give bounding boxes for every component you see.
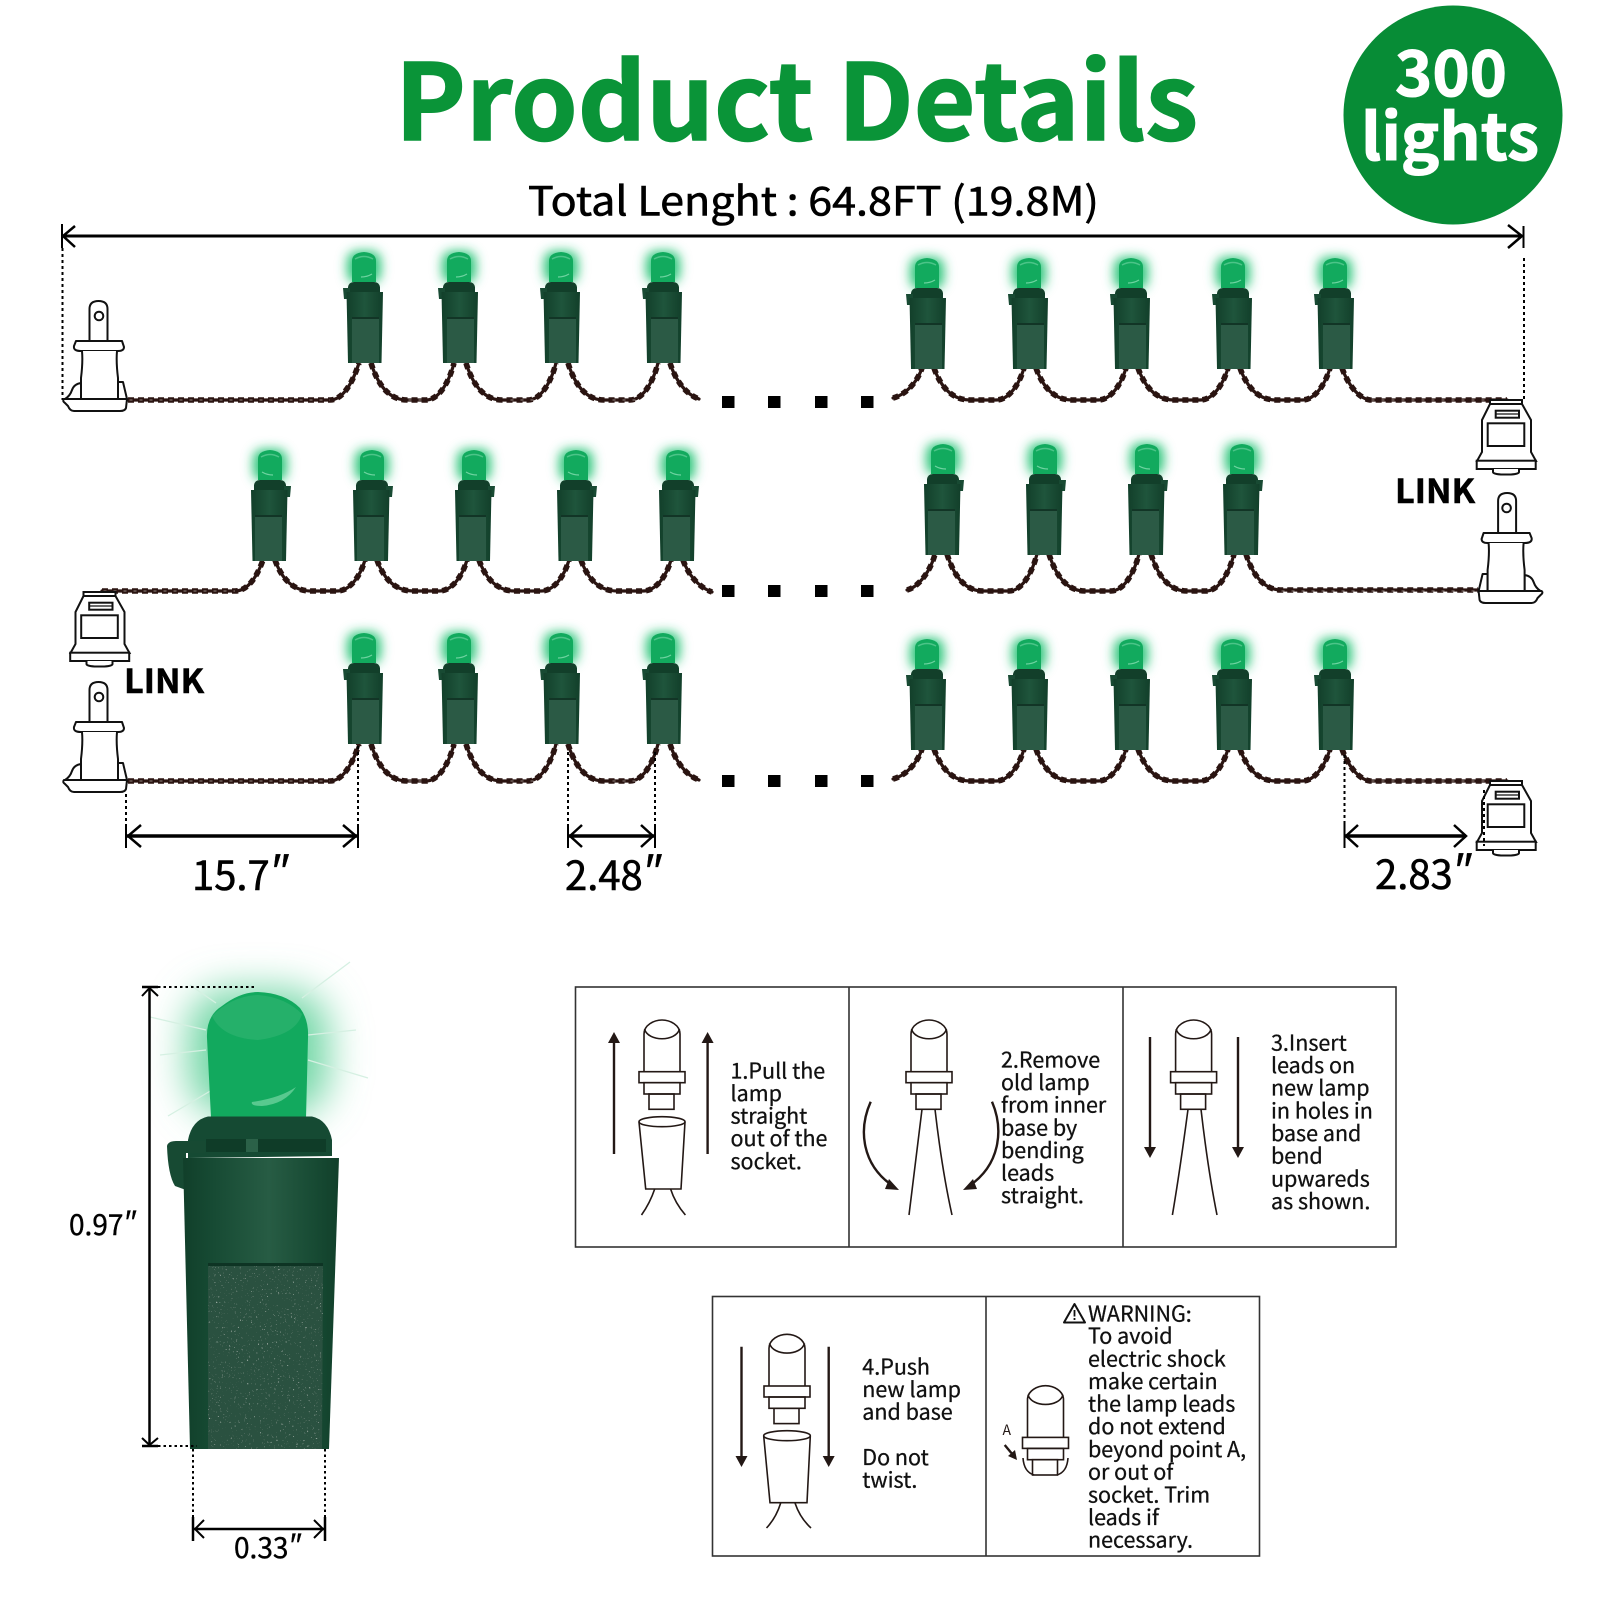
- warning: electric shock: [1088, 1342, 1226, 1374]
- lamp bulb: [207, 992, 308, 1118]
- warning: leads if: [1088, 1501, 1160, 1532]
- step 2: 2.Remove: [1001, 1044, 1100, 1074]
- badge: 300 lights: lights: [1361, 87, 1539, 179]
- step 4: [736, 1334, 961, 1528]
- step 1: socket.: [730, 1145, 802, 1176]
- badge: 300 lights: 300: [1395, 24, 1507, 115]
- total length label: Total Lenght : 64.8FT (19.8M): [528, 170, 1099, 228]
- step 2: old lamp: [1001, 1066, 1090, 1097]
- dimension: 15.7 inch: 15.7: [192, 844, 270, 902]
- light string row 1: [63, 251, 1536, 474]
- step 3: new lamp: [1271, 1072, 1370, 1102]
- step 3: upwareds: [1271, 1162, 1370, 1194]
- light string row 3: [63, 632, 1536, 856]
- LINK label right: LINK: [1395, 465, 1475, 513]
- step 2: bending: [1001, 1134, 1084, 1165]
- step 4: Do not: [862, 1441, 929, 1472]
- warning: make certain: [1088, 1365, 1218, 1396]
- dimension: 2.48 inch: 2.48: [565, 844, 643, 902]
- step 2: straight.: [1001, 1179, 1084, 1210]
- step 4: twist.: [862, 1464, 917, 1494]
- lamp glow and rays: [150, 962, 368, 1116]
- width label: ″: [288, 1527, 301, 1565]
- lamp socket body: [167, 1116, 339, 1449]
- step 2: leads: [1001, 1156, 1054, 1188]
- total length arrow: [62, 224, 1524, 400]
- warning: do not extend: [1088, 1410, 1226, 1441]
- step 3: as shown.: [1271, 1185, 1370, 1216]
- dimension: 2.83 inch: 2.83: [1375, 843, 1453, 901]
- warning: socket. Trim: [1088, 1478, 1210, 1510]
- warning: necessary.: [1088, 1524, 1193, 1554]
- light string row 2: [70, 443, 1542, 666]
- step 1: straight: [730, 1100, 807, 1130]
- dimension: 2.48 inch: ″: [643, 844, 663, 900]
- dimension: 2.83 inch: ″: [1453, 843, 1473, 899]
- step 4: and base: [862, 1396, 953, 1426]
- step 1: out of the: [730, 1122, 827, 1153]
- instruction panel: steps 1 to 3: [576, 987, 1396, 1247]
- title: Product Details: [395, 19, 1198, 171]
- height label: ″: [123, 1204, 136, 1242]
- warning: [1002, 1298, 1246, 1554]
- step 1: lamp: [730, 1077, 782, 1108]
- dimension: 15.7 inch: [126, 746, 358, 902]
- warning: WARNING:: [1088, 1298, 1192, 1328]
- lamp height dimension: [142, 987, 255, 1446]
- step 3: leads on: [1271, 1049, 1355, 1080]
- warning: A: [1002, 1420, 1012, 1440]
- badge: 300 lights: [1344, 6, 1562, 224]
- large lamp close-up: [69, 962, 368, 1567]
- height label: 0.97: [69, 1204, 123, 1244]
- warning: To avoid: [1088, 1320, 1173, 1350]
- dimension: 2.48 inch: [565, 752, 663, 902]
- step 4: new lamp: [862, 1373, 961, 1404]
- step 2: [864, 1020, 1107, 1215]
- step 3: in holes in: [1271, 1094, 1373, 1126]
- warning: the lamp leads: [1088, 1388, 1235, 1418]
- dimension: 15.7 inch: ″: [270, 844, 290, 900]
- warning: beyond point A,: [1088, 1433, 1246, 1464]
- warning icon: [1064, 1304, 1085, 1322]
- lamp width dimension: [193, 1449, 325, 1541]
- step 3: 3.Insert: [1271, 1026, 1347, 1058]
- step 1: [608, 1020, 827, 1215]
- step 3: bend: [1271, 1140, 1323, 1170]
- instruction panel: step 4 and warning: [712, 1296, 1260, 1556]
- warning: or out of: [1088, 1456, 1174, 1486]
- step 2: from inner: [1001, 1088, 1107, 1120]
- width label: 0.33: [234, 1527, 288, 1567]
- step 1: 1.Pull the: [730, 1054, 825, 1086]
- LINK label left: LINK: [124, 655, 204, 703]
- step 3: [1144, 1020, 1373, 1216]
- step 2: base by: [1001, 1112, 1077, 1142]
- step 3: base and: [1271, 1117, 1361, 1148]
- step 4: 4.Push: [862, 1350, 930, 1382]
- dimension: 2.83 inch: [1344, 755, 1484, 901]
